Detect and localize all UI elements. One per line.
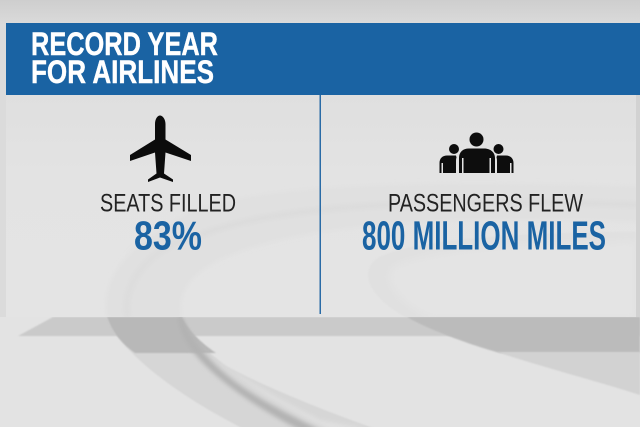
label: passengers flew: PASSENGERS FLEW: [388, 190, 583, 218]
title: RECORD YEAR: [31, 26, 218, 62]
background shadows below panel: [18, 317, 640, 427]
value: 83%: 83%: [134, 212, 202, 258]
icon: airplane: [130, 116, 191, 182]
header band: [6, 23, 640, 95]
swoosh band: [106, 184, 640, 318]
title: [31, 26, 218, 90]
translucent panel: [635, 95, 636, 317]
icon: passengers: [440, 132, 514, 173]
title: FOR AIRLINES: [31, 54, 214, 90]
label: seats filled: SEATS FILLED: [100, 190, 236, 218]
right ellipse: [368, 232, 636, 318]
divider: [320, 95, 321, 314]
